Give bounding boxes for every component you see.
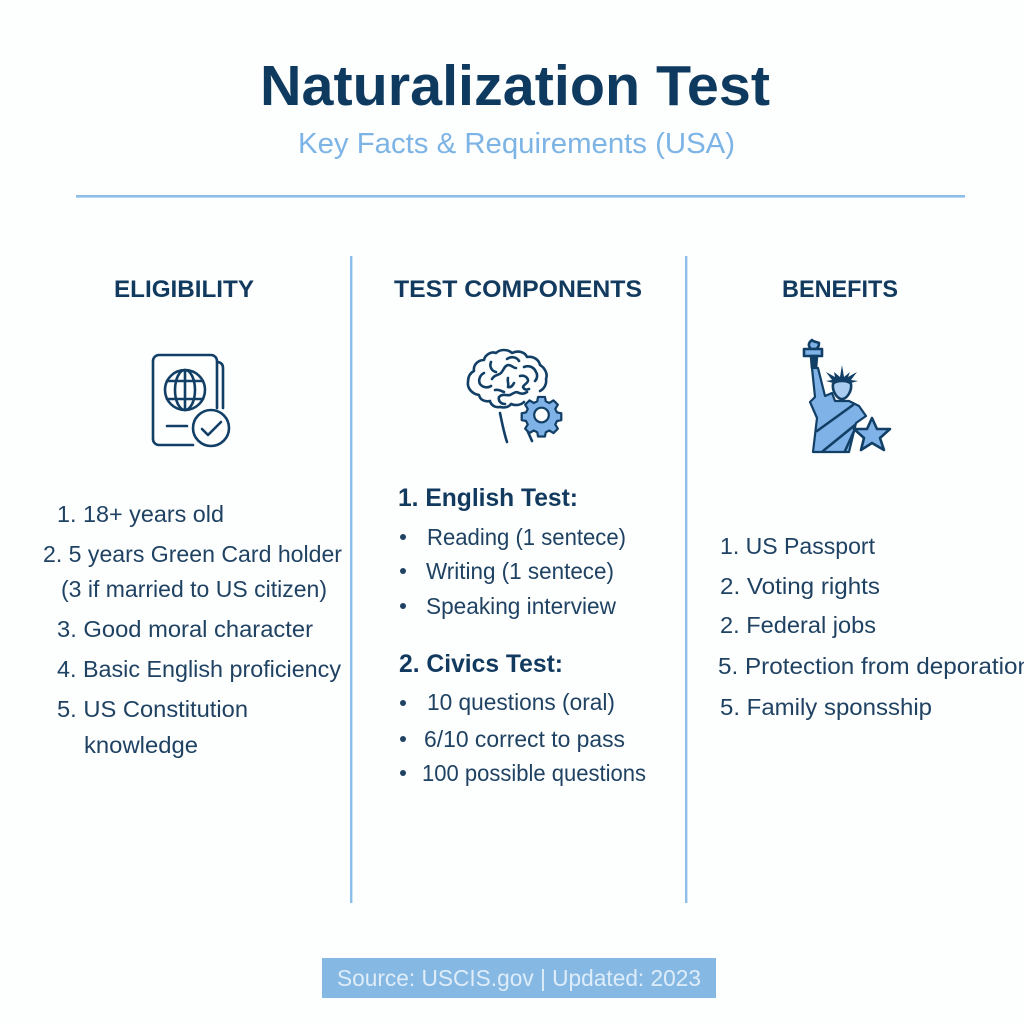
list: benefits: 5. Family sponsship xyxy=(720,694,932,720)
list: eligibility: knowledge xyxy=(84,732,198,758)
list: eligibility: (3 if married to US citizen) xyxy=(61,576,327,602)
list: civics test xyxy=(399,650,646,786)
list: benefits: 5. Protection from deporation xyxy=(718,653,1024,679)
list: english test: Reading (1 sentece) xyxy=(427,524,626,550)
panel: benefits xyxy=(718,276,1024,720)
list: civics test: 10 questions (oral) xyxy=(427,689,615,715)
icon: brain with gear xyxy=(468,350,561,442)
list: benefits: 1. US Passport xyxy=(720,533,875,559)
footer: source xyxy=(322,958,716,998)
list: civics test: 2. Civics Test: xyxy=(399,650,563,678)
list: eligibility: 3. Good moral character xyxy=(57,616,313,642)
list: eligibility: 4. Basic English proficiency xyxy=(57,656,341,682)
list: english test: Writing (1 sentece) xyxy=(426,558,614,584)
list: eligibility: 2. 5 years Green Card holder xyxy=(43,541,342,567)
list: benefits: 2. Federal jobs xyxy=(720,612,876,638)
panel: test components xyxy=(394,276,646,786)
panel: eligibility xyxy=(43,276,342,758)
list: eligibility: 1. 18+ years old xyxy=(57,501,224,527)
list: civics test: 6/10 correct to pass xyxy=(424,726,625,752)
list: benefits xyxy=(718,533,1024,720)
icon: statue of liberty with star xyxy=(804,340,890,452)
heading: benefits: BENEFITS xyxy=(782,276,898,303)
list: english test: 1. English Test: xyxy=(398,484,578,512)
title: Naturalization Test xyxy=(260,54,770,118)
list: eligibility: 5. US Constitution xyxy=(57,696,248,722)
heading: test components: TEST COMPONENTS xyxy=(394,276,642,303)
footer: source: Source: USCIS.gov | Updated: 2023 xyxy=(337,965,701,991)
list: english test: Speaking interview xyxy=(426,593,617,619)
list: eligibility xyxy=(43,501,342,758)
list: benefits: 2. Voting rights xyxy=(720,573,880,599)
list: civics test: 100 possible questions xyxy=(422,760,646,786)
heading: eligibility: ELIGIBILITY xyxy=(114,276,254,303)
list: english test xyxy=(398,484,626,619)
subtitle: Key Facts & Requirements (USA) xyxy=(298,128,735,160)
icon: passport with check xyxy=(153,355,229,446)
